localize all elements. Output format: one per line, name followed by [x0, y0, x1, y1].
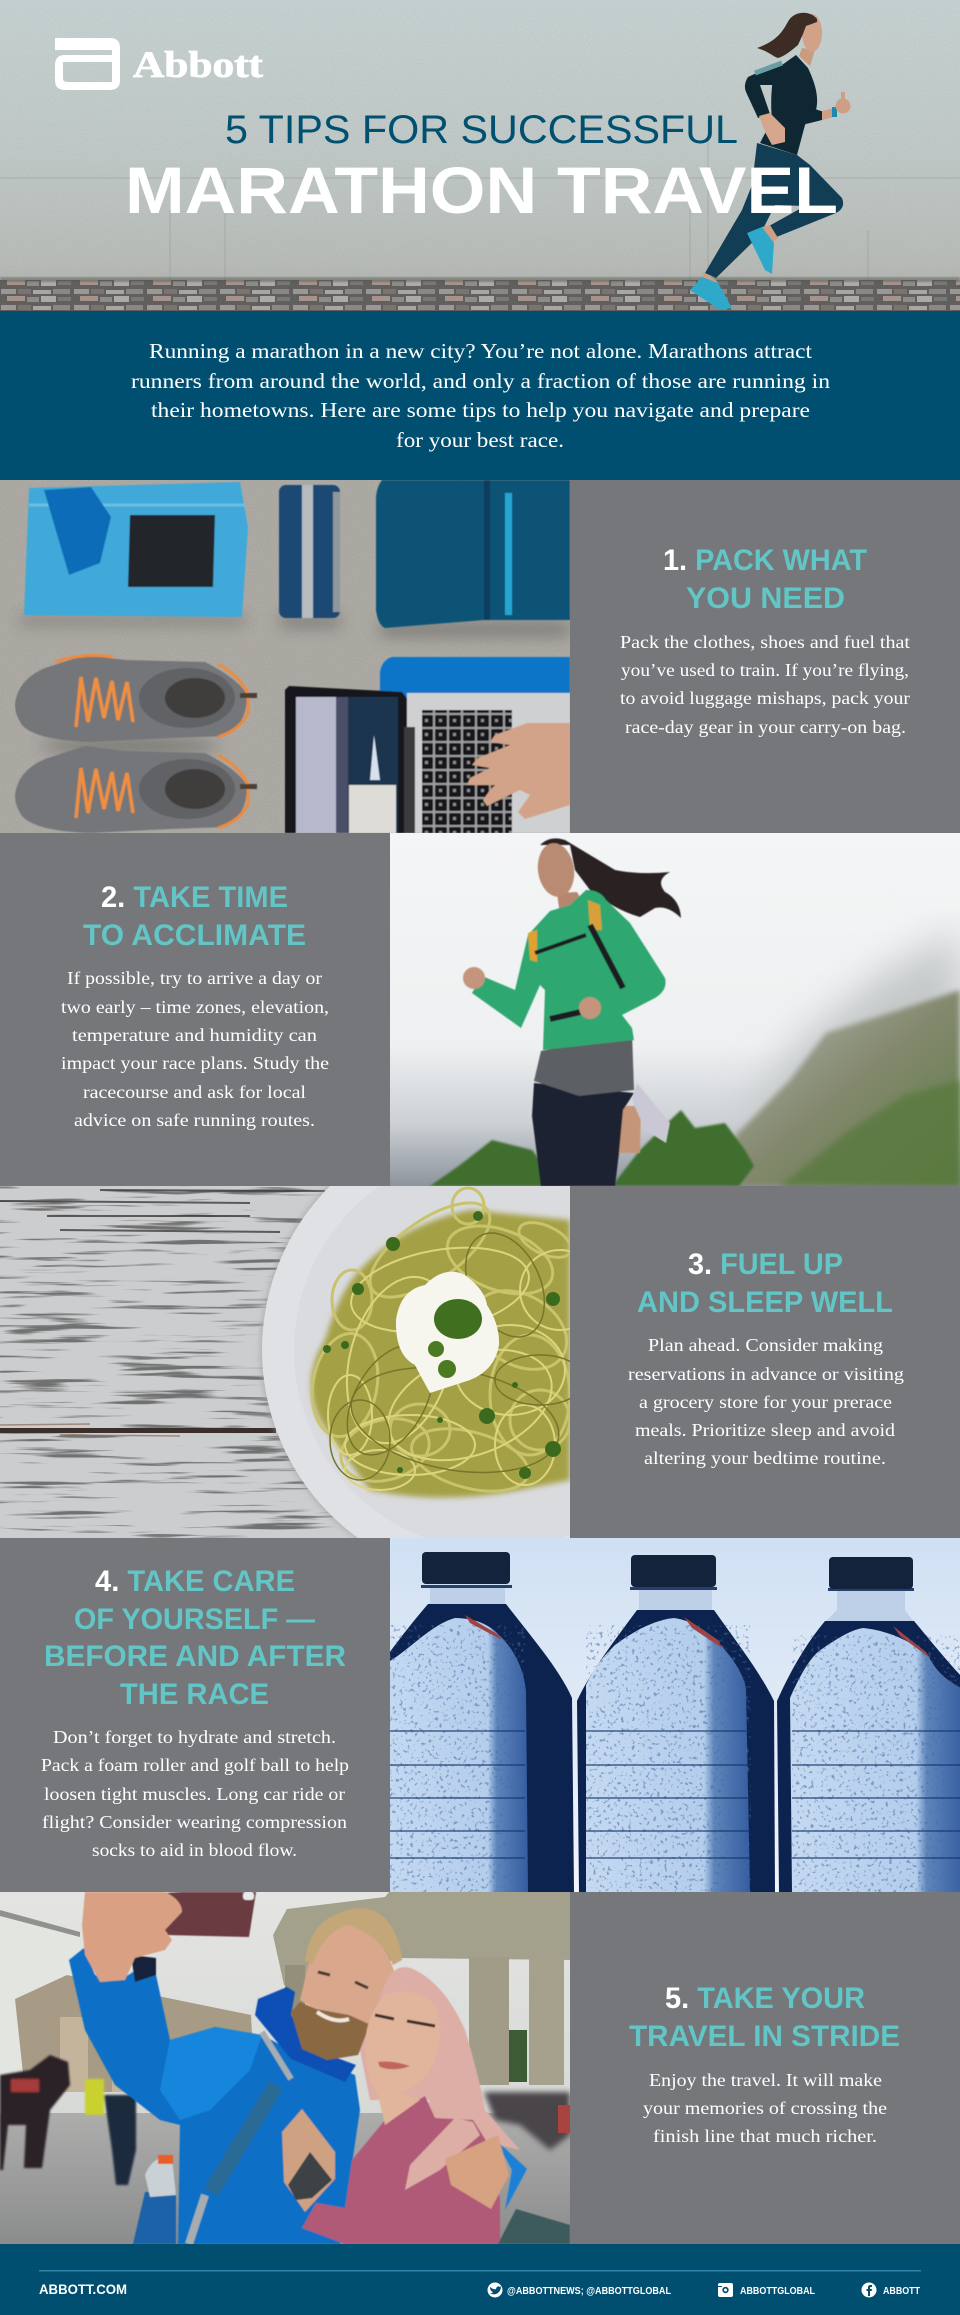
- hood: [255, 1987, 356, 2082]
- panel: tip 2: [0, 833, 390, 1186]
- photo: woman running on foggy mountain: [390, 833, 960, 1186]
- ground: [0, 2113, 570, 2244]
- pasta: [311, 1210, 570, 1498]
- body: tip 4: Pack a foam roller and golf ball to help: [41, 1755, 349, 1775]
- intro text: [131, 339, 831, 452]
- shoe top: [15, 655, 257, 742]
- heading: tip 4: 4. TAKE CARE: [95, 1565, 295, 1598]
- panel: tip 1: [570, 480, 960, 833]
- body: tip 3: altering your bedtime routine.: [644, 1448, 886, 1468]
- panel: tip 3: [570, 1186, 960, 1538]
- body: tip 3: [628, 1335, 904, 1468]
- woman's jacket: [302, 2096, 500, 2244]
- title line 1: 5 TIPS FOR SUCCESSFUL: [225, 108, 738, 152]
- heading: tip 4: [44, 1565, 346, 1711]
- hand raised: [82, 1892, 182, 1982]
- condensation droplets: [390, 1625, 960, 1892]
- body: tip 2: racecourse and ask for local: [83, 1082, 306, 1102]
- bush: [430, 1110, 754, 1186]
- shorts: [534, 1033, 634, 1096]
- shoe bottom: [15, 746, 257, 833]
- icon: Abbott mark: [55, 38, 120, 90]
- Brandenburg gate: [273, 1892, 570, 1985]
- instagram handle: ABBOTTGLOBAL: [740, 2286, 815, 2297]
- temple: [15, 1975, 255, 2092]
- body: tip 5: Enjoy the travel. It will make: [649, 2070, 882, 2090]
- body: tip 4: socks to aid in blood flow.: [92, 1840, 297, 1860]
- plate: [258, 1186, 358, 1538]
- heading: tip 3: 3. FUEL UP: [688, 1248, 843, 1281]
- body: tip 2: temperature and humidity can: [72, 1025, 317, 1045]
- man's hand: [495, 2139, 527, 2210]
- body: tip 2: advice on safe running routes.: [74, 1110, 315, 1130]
- logo wordmark: Abbott: [133, 45, 264, 86]
- body: tip 2: [61, 968, 329, 1130]
- facebook handle: ABBOTT: [883, 2286, 920, 2297]
- man's jacket: [69, 1948, 360, 2244]
- photo: packed running gear: [0, 480, 570, 833]
- man's head: [291, 1908, 402, 2060]
- panel: tip 5: [570, 1892, 960, 2244]
- crowd: [0, 2055, 136, 2185]
- intro panel: [0, 311, 960, 480]
- title line 2: MARATHON TRAVEL: [125, 153, 838, 227]
- icon: facebook: [862, 2282, 876, 2298]
- body: tip 2: two early – time zones, elevation,: [61, 997, 329, 1017]
- body: tip 3: meals. Prioritize sleep and avoid: [635, 1420, 895, 1440]
- blue case: [380, 657, 570, 700]
- body: tip 1: to avoid luggage mishaps, pack your: [620, 688, 910, 708]
- heading: tip 2: 2. TAKE TIME: [101, 881, 288, 914]
- body: tip 1: you’ve used to train. If you’re flying,: [621, 660, 909, 680]
- photo: couple taking selfie in Berlin: [0, 1892, 570, 2244]
- body: tip 4: [41, 1727, 349, 1860]
- body: tip 4: Don’t forget to hydrate and stretch.: [53, 1727, 336, 1747]
- body: tip 5: finish line that much richer.: [653, 2126, 877, 2146]
- bottle 1: [380, 1552, 574, 1892]
- body: tip 1: Pack the clothes, shoes and fuel that: [620, 632, 910, 652]
- jacket: [472, 890, 666, 1050]
- body: tip 2: impact your race plans. Study the: [61, 1053, 329, 1073]
- bottle 3: [777, 1557, 960, 1892]
- ricotta: [396, 1272, 499, 1393]
- backpack right: [498, 2209, 570, 2244]
- heading: tip 1: 1. PACK WHAT: [663, 544, 867, 577]
- icon: runner: [690, 13, 850, 310]
- logo: Abbott: [55, 38, 264, 90]
- heading: tip 1: YOU NEED: [686, 582, 845, 615]
- hand: [467, 723, 570, 819]
- body: tip 3: a grocery store for your prerace: [639, 1392, 892, 1412]
- body: tip 1: [620, 632, 910, 737]
- backpack straps: [262, 2032, 291, 2079]
- heading: tip 2: TO ACCLIMATE: [83, 919, 306, 952]
- bottle ribs: [390, 1731, 960, 1858]
- intro text: their hometowns. Here are some tips to help you navigate and prepare: [151, 398, 810, 422]
- body: tip 1: race-day gear in your carry-on bag.: [625, 717, 906, 737]
- backpack straps: [528, 930, 537, 962]
- jacket: [376, 480, 570, 628]
- header photo: runner against concrete wall: [0, 0, 960, 311]
- body: tip 4: loosen tight muscles. Long car ride or: [44, 1784, 345, 1804]
- body: tip 2: If possible, try to arrive a day or: [67, 968, 322, 988]
- icon: instagram: [718, 2283, 733, 2297]
- body: tip 5: [643, 2070, 887, 2146]
- pouch: [279, 485, 340, 618]
- legs: [617, 1106, 641, 1153]
- hair: [540, 838, 681, 918]
- building left: [0, 2042, 22, 2074]
- title: [125, 108, 838, 227]
- body: tip 5: your memories of crossing the: [643, 2098, 887, 2118]
- tattooed hand: [282, 2109, 335, 2212]
- intro text: runners from around the world, and only a fraction of those are running in: [131, 369, 831, 393]
- heading: tip 5: TRAVEL IN STRIDE: [629, 2020, 900, 2053]
- blue shirt: [24, 482, 248, 617]
- phone: [164, 1892, 257, 1938]
- woman's hair: [360, 1967, 520, 2185]
- heading: tip 3: AND SLEEP WELL: [637, 1286, 893, 1319]
- heading: tip 1: [663, 544, 867, 615]
- website link: ABBOTT.COM: [39, 2281, 127, 2297]
- body: tip 3: reservations in advance or visiting: [628, 1364, 904, 1384]
- heading: tip 5: 5. TAKE YOUR: [665, 1982, 865, 2015]
- backpack left: [133, 2192, 176, 2244]
- photo: pesto pasta on wooden table: [0, 1186, 570, 1538]
- heading: tip 3: [637, 1248, 893, 1319]
- body: tip 4: flight? Consider wearing compression: [42, 1812, 347, 1832]
- panel: tip 4: [0, 1538, 390, 1892]
- icon: twitter: [488, 2282, 502, 2298]
- wallet: [128, 515, 215, 587]
- pesto flecks: [323, 1211, 561, 1479]
- intro text: for your best race.: [396, 428, 564, 452]
- photo: water bottles: [380, 1538, 960, 1892]
- laptop: [285, 686, 570, 833]
- woman's face: [365, 1992, 440, 2125]
- heading: tip 4: OF YOURSELF —: [74, 1603, 315, 1636]
- twitter handles: @ABBOTTNEWS; @ABBOTTGLOBAL: [507, 2286, 671, 2297]
- heading: tip 5: [629, 1982, 900, 2053]
- heading: tip 4: THE RACE: [120, 1678, 269, 1711]
- intro text: Running a marathon in a new city? You’re not alone. Marathons attract: [149, 339, 812, 363]
- bottle 2: [577, 1555, 775, 1892]
- footer: [0, 2244, 960, 2315]
- heading: tip 4: BEFORE AND AFTER: [44, 1640, 346, 1673]
- body: tip 3: Plan ahead. Consider making: [648, 1335, 883, 1355]
- heading: tip 2: [83, 881, 306, 952]
